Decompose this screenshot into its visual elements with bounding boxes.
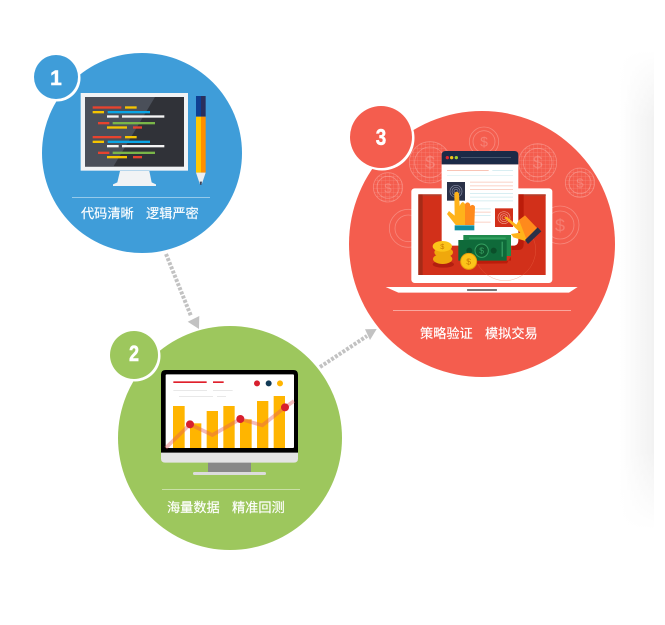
money stack [458,235,511,264]
arrow: step 2 to step 3 [320,329,377,367]
gold coins [433,241,477,269]
money stack: $ [479,246,484,256]
web page [442,164,518,246]
hand: pointing left [504,215,541,244]
icon: code monitor [81,93,188,186]
step 1 circle [42,53,242,253]
background coins: $ [480,134,488,150]
laptop base [386,287,578,293]
step 1 badge: 1 [50,67,62,90]
gold coins: $ [440,242,444,251]
step 2 circle [118,326,342,550]
right edge shadow [620,50,654,530]
background coins: $ [425,152,435,172]
background coins: $ [384,180,392,195]
step 2 caption: 海量数据 [167,500,220,515]
arrow: step 1 to step 2 [166,254,199,329]
step 1 caption: 逻辑严密 [146,205,199,221]
step 3 badge [350,106,414,170]
icon: laptop with trading page [386,151,578,293]
background coins [373,127,595,247]
step 3 caption: 策略验证 [420,325,473,341]
divider [72,197,210,198]
background coins: $ [533,153,543,173]
panel: step 3 validation [349,106,615,377]
divider [393,310,571,311]
step 3 circle [349,111,615,377]
background coins: $ [555,216,565,236]
fingerprint squares [447,182,465,201]
step 3 badge: 3 [376,125,386,150]
icon: pencil [196,96,206,185]
laptop lid [411,188,552,283]
background coins: $ [576,176,584,191]
icon: chart monitor [161,370,298,475]
hand: pointing up [447,192,475,230]
step 3 caption: 模拟交易 [485,325,538,341]
step 2 caption: 精准回测 [232,500,285,515]
step 1 caption: 代码清晰 [81,206,134,221]
panel: step 1 code [34,53,242,253]
panel: step 2 data [110,326,342,550]
step 1 badge [34,54,80,102]
step 2 badge: 2 [129,342,139,366]
divider [162,489,300,490]
gold coins: $ [466,257,471,267]
step 2 badge [110,330,160,382]
